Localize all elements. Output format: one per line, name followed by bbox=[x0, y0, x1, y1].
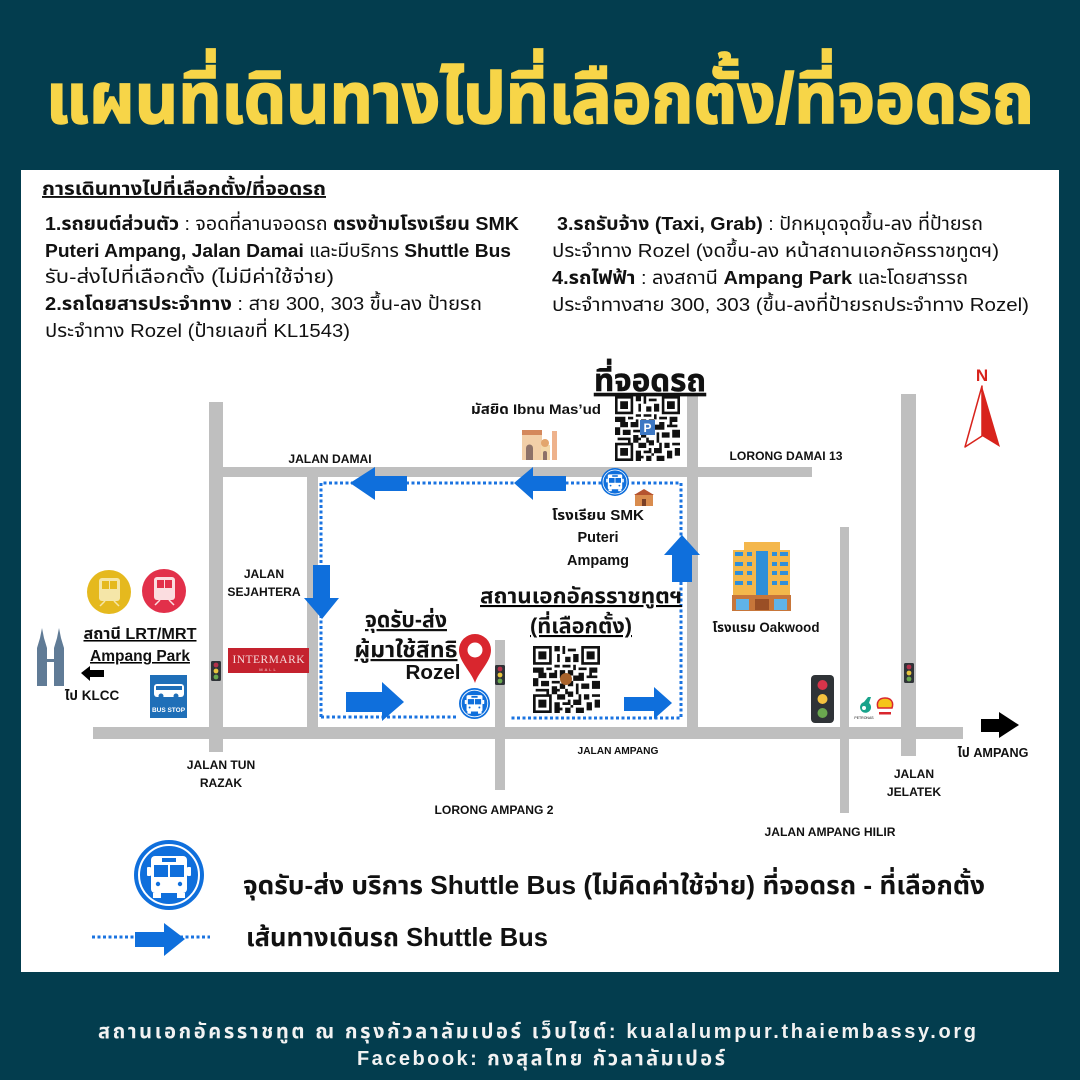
footer: สถานเอกอัครราชทูต ณ กรุงกัวลาลัมเปอร์ เว็บไซต์: kualalumpur.thaiembassy.org bbox=[98, 1020, 976, 1043]
road labels: JALAN AMPANG bbox=[578, 746, 659, 757]
road labels: LORONG AMPANG 2 bbox=[435, 803, 554, 817]
label: school: โรงเรียน SMK bbox=[552, 508, 645, 524]
map roads bbox=[93, 394, 963, 813]
text: taxi line 1: 3.รถรับจ้าง (Taxi, Grab) : ปักหมุดจุดขึ้น-ลง ที่ป้ายรถ bbox=[557, 211, 983, 235]
icon: bus stop sign: BUS STOP bbox=[152, 707, 186, 714]
logo: Petronas: PETRONAS bbox=[854, 716, 874, 720]
road labels: JALAN TUN bbox=[187, 758, 255, 772]
label: Rozel pick-up point: ผู้มาใช้สิทธิ bbox=[354, 637, 458, 663]
text: train line 2: ประจำทางสาย 300, 303 (ขึ้น-ลงที่ป้ายรถประจำทาง Rozel) bbox=[552, 292, 1029, 315]
logo: Intermark Mall bbox=[228, 648, 309, 673]
icon: mosque bbox=[522, 430, 557, 460]
heading: embassy: (ที่เลือกตั้ง) bbox=[530, 611, 632, 638]
label: school: Puteri bbox=[577, 530, 619, 546]
text: private car line 1: 1.รถยนต์ส่วนตัว : จอดที่ลานจอดรถ ตรงข้ามโรงเรียน SMK bbox=[45, 211, 520, 234]
text: taxi line 2: ประจำทาง Rozel (งดขึ้น-ลง หน้าสถานเอกอัครราชทูตฯ) bbox=[552, 238, 999, 263]
icon: Petronas towers bbox=[37, 628, 64, 686]
icon: traffic light Jelatek bbox=[904, 663, 914, 683]
label: Rozel pick-up point: จุดรับ-ส่ง bbox=[365, 607, 447, 633]
icon: traffic light Tun Razak bbox=[211, 661, 221, 681]
footer: Facebook: กงสุลไทย กัวลาลัมเปอร์ bbox=[357, 1048, 725, 1070]
road labels: SEJAHTERA bbox=[227, 585, 301, 599]
title: แผนที่เดินทางไปที่เลือกตั้ง/ที่จอดรถ bbox=[46, 49, 1034, 139]
panel: travel directions bbox=[42, 175, 1029, 341]
logo: Intermark Mall: MALL bbox=[259, 667, 278, 672]
heading: embassy bbox=[480, 585, 682, 638]
label: station: สถานี LRT/MRT bbox=[84, 626, 197, 643]
heading: embassy: สถานเอกอัครราชทูตฯ bbox=[480, 585, 682, 609]
road labels: JALAN bbox=[894, 767, 934, 781]
legend: shuttle stop icon bbox=[134, 840, 204, 910]
road labels: JELATEK bbox=[887, 785, 941, 799]
text: public bus line 2: ประจำทาง Rozel (ป้ายเลขที่ KL1543) bbox=[45, 318, 350, 341]
panel: white map panel bbox=[21, 170, 1059, 972]
icon: school bbox=[634, 489, 654, 506]
label: school: Ampamg bbox=[567, 553, 629, 569]
road labels: JALAN DAMAI bbox=[288, 452, 372, 466]
arrow: to Ampang bbox=[981, 712, 1019, 738]
legend: route text: เส้นทางเดินรถ Shuttle Bus bbox=[246, 922, 548, 952]
road labels: RAZAK bbox=[200, 776, 242, 790]
icon: traffic light Lorong Ampang 2 bbox=[495, 665, 505, 685]
label: Rozel pick-up point: Rozel bbox=[406, 662, 460, 684]
label: to Ampang: ไป AMPANG bbox=[958, 745, 1028, 760]
road labels: JALAN bbox=[244, 567, 284, 581]
label: to KLCC: ไป KLCC bbox=[65, 688, 119, 703]
road labels: LORONG DAMAI 13 bbox=[730, 449, 843, 463]
text: public bus line 1: 2.รถโดยสารประจำทาง : สาย 300, 303 ขึ้น-ลง ป้ายรถ bbox=[45, 291, 482, 314]
shuttle route dotted line bbox=[321, 483, 681, 718]
north arrow: N bbox=[976, 366, 988, 385]
text: train line 1: 4.รถไฟฟ้า : ลงสถานี Ampang Park และโดยสารรถ bbox=[552, 267, 968, 288]
icon: traffic light Ampang Hilir bbox=[811, 675, 834, 723]
label: school bbox=[552, 508, 645, 569]
label: station bbox=[84, 626, 197, 665]
parking QR code bbox=[615, 396, 680, 461]
footer bbox=[98, 1020, 976, 1070]
label: station: Ampang Park bbox=[90, 648, 190, 665]
logo: Petronas bbox=[854, 697, 874, 720]
text: private car line 2: Puteri Ampang, Jalan Damai และมีบริการ Shuttle Bus bbox=[45, 240, 511, 261]
logo: Intermark Mall: INTERMARK bbox=[232, 654, 305, 666]
road labels bbox=[187, 449, 941, 839]
icon: shuttle stop Rozel bbox=[459, 688, 490, 719]
icon: location pin bbox=[459, 634, 491, 683]
heading: parking: ที่จอดรถ bbox=[594, 358, 706, 398]
legend: route line and arrow bbox=[92, 923, 210, 956]
legend: shuttle stop text: จุดรับ-ส่ง บริการ Shuttle Bus (ไม่คิดค่าใช้จ่าย) ที่จอดรถ - ที่เลือกตั้ง bbox=[243, 867, 985, 901]
north arrow bbox=[965, 366, 1000, 447]
label: Oakwood hotel: โรงแรม Oakwood bbox=[712, 620, 820, 635]
icon: bus stop sign bbox=[150, 675, 187, 718]
icon: MRT station bbox=[142, 569, 186, 613]
icon: shuttle stop Jalan Damai bbox=[601, 468, 629, 496]
arrows: shuttle direction bbox=[304, 467, 700, 721]
icon: Oakwood hotel bbox=[732, 542, 791, 611]
arrow: to KLCC bbox=[81, 666, 104, 681]
road labels: JALAN AMPANG HILIR bbox=[764, 825, 896, 839]
icon: LRT station bbox=[87, 570, 131, 614]
heading: directions: การเดินทางไปที่เลือกตั้ง/ที่จอดรถ bbox=[42, 175, 326, 200]
text: private car line 3: รับ-ส่งไปที่เลือกตั้ง (ไม่มีค่าใช้จ่าย) bbox=[45, 264, 334, 287]
parking QR code: P bbox=[643, 421, 652, 435]
logo: Shell bbox=[877, 698, 893, 714]
label: mosque: มัสยิด Ibnu Mas’ud bbox=[471, 401, 601, 417]
embassy QR code bbox=[533, 646, 600, 713]
label: Rozel pick-up point bbox=[354, 607, 460, 684]
